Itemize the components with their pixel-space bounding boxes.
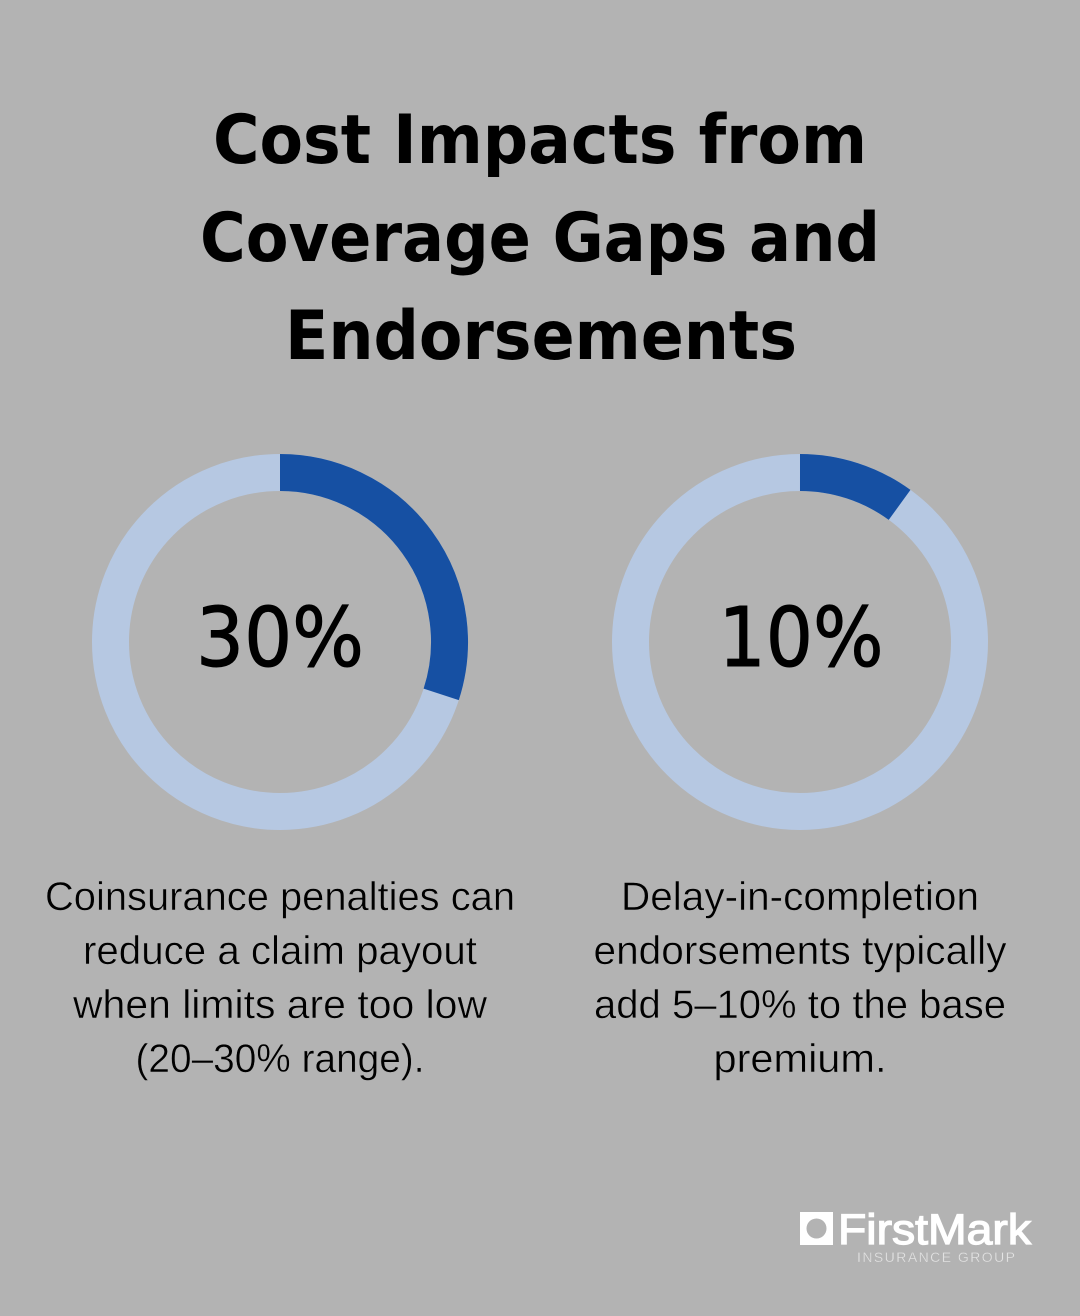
text: endorsement description	[594, 875, 1006, 1081]
text: coinsurance description: (20–30% range).	[136, 1037, 424, 1081]
logo wordmark: FirstMark	[838, 1206, 1032, 1254]
text: coinsurance description: when limits are too low	[72, 983, 487, 1027]
text: endorsement description: endorsements typically	[594, 929, 1006, 973]
title: Cost Impacts from	[213, 101, 867, 180]
text: coinsurance description: reduce a claim payout	[83, 929, 477, 973]
title	[200, 101, 880, 376]
stat: 30%: 30%	[196, 591, 364, 686]
title: Endorsements	[285, 297, 797, 376]
icon: logo square	[800, 1212, 833, 1245]
logo: FirstMark Insurance Group	[800, 1206, 1032, 1265]
donut chart: 10%	[630, 472, 970, 812]
text: endorsement description: add 5–10% to the base	[594, 983, 1006, 1027]
stat: 10%: 10%	[718, 591, 884, 686]
logo tagline: INSURANCE GROUP	[857, 1249, 1015, 1265]
panel: coinsurance penalties	[45, 472, 515, 1081]
text: coinsurance description: Coinsurance penalties can	[45, 875, 515, 919]
text: endorsement description: premium.	[714, 1037, 886, 1081]
title: Coverage Gaps and	[200, 199, 880, 278]
text: endorsement description: Delay-in-completion	[621, 875, 979, 919]
donut chart: 30%	[110, 472, 450, 812]
text: coinsurance description	[45, 875, 515, 1081]
panel: delay-in-completion endorsements	[594, 472, 1006, 1081]
